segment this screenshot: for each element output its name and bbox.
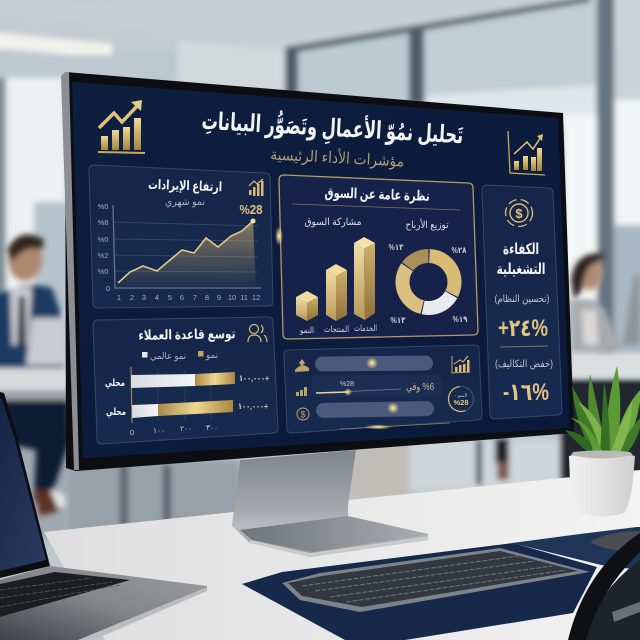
icon: scale <box>295 359 309 372</box>
donut labels: %٢٨ <box>452 245 467 255</box>
y axis labels: %0 <box>98 235 108 244</box>
panel heading <box>496 241 546 278</box>
y axis labels: %2 <box>98 251 108 260</box>
x axis labels: 9 <box>217 293 221 302</box>
x axis labels: 10 <box>228 293 236 302</box>
metric value: -١٦% <box>503 379 549 406</box>
donut labels: %١٣ <box>390 315 406 325</box>
x axis labels: 2 <box>130 293 134 302</box>
donut labels: %١٩ <box>452 314 468 324</box>
stand neck <box>232 450 428 557</box>
x axis labels: 11 <box>240 293 248 302</box>
panel background <box>93 317 278 444</box>
laptop base <box>0 566 207 640</box>
slider two: %28 <box>340 381 354 388</box>
gauge: النمو - <box>455 393 467 399</box>
line chart <box>98 202 261 302</box>
icon: dollar: $ <box>300 410 306 420</box>
laptop keyboard <box>0 572 130 618</box>
metric value: +٢٤% <box>498 315 548 342</box>
chair <box>568 533 640 640</box>
bar chart: محلي <box>105 378 125 389</box>
icon: right growth chart <box>508 131 545 175</box>
subtitle: مؤشرات الأداء الرئيسية <box>270 145 405 171</box>
panel heading: ارتفاع الإيرادات <box>148 177 222 194</box>
icon: coin <box>506 200 532 226</box>
x axis labels: 3 <box>142 293 146 302</box>
laptop lid <box>0 391 50 579</box>
panel: customer base <box>93 317 278 444</box>
slider two <box>312 375 442 397</box>
x axis labels: ٢٠٠ <box>180 424 192 433</box>
bar chart <box>105 367 269 437</box>
slider one <box>315 355 433 372</box>
panel: revenue growth <box>89 165 273 308</box>
x axis labels <box>117 293 260 302</box>
x axis labels: ٣٠٠ <box>206 423 218 432</box>
icon: mini bars <box>249 179 264 196</box>
icon: coin: $ <box>515 206 523 221</box>
main title: تَحليل نمُوّ الأعمالِ وتَصَوُّر البياناتِ <box>201 106 464 153</box>
legend: نمو عالمي <box>150 351 186 362</box>
x axis labels: 4 <box>155 293 159 302</box>
3D gold bars: النمو <box>299 325 314 335</box>
background person right <box>570 254 640 378</box>
bars heading: مشاركة السوق <box>304 217 362 228</box>
mouse <box>590 531 640 551</box>
pot <box>569 452 635 516</box>
y axis labels: %0 <box>98 202 108 211</box>
3D gold bars: الخدمات <box>354 323 377 333</box>
metric label: (تحسين النظام) <box>494 294 550 305</box>
panel subheading: نمو شهري <box>165 197 205 208</box>
slider two: %6 وفي <box>406 382 434 393</box>
bar chart: ١٠٠,٠٠٠+ <box>238 401 268 411</box>
panel: market overview <box>275 175 478 339</box>
3D gold bars: المنتجات <box>324 324 349 334</box>
panel: indicators <box>284 345 482 433</box>
slider three <box>316 401 434 418</box>
legend <box>142 350 218 362</box>
laptop <box>0 391 207 640</box>
panel background <box>284 345 482 433</box>
legend: نمو <box>205 350 218 361</box>
panel heading: توسع قاعدة العملاء <box>138 326 236 343</box>
gauge <box>445 383 477 415</box>
callout: 28 percent: %28 <box>240 202 262 217</box>
desk mat <box>242 543 597 640</box>
donut labels: %١٣ <box>388 242 404 252</box>
icon: left growth chart <box>98 100 145 153</box>
panel: operational efficiency <box>482 185 562 419</box>
donut labels <box>388 242 468 325</box>
icon: dollar <box>297 408 309 420</box>
x axis labels: 1 <box>117 293 121 302</box>
y axis labels <box>98 202 110 293</box>
keyboard <box>282 548 590 612</box>
x axis labels <box>130 423 218 437</box>
x axis labels: 6 <box>180 293 184 302</box>
background person left <box>0 234 70 516</box>
x axis labels: ١٠٠ <box>153 426 165 435</box>
x axis labels: 0 <box>130 428 134 437</box>
laptop screen <box>0 398 46 572</box>
monitor bezel <box>65 72 574 471</box>
icon: chart <box>452 356 470 373</box>
plant <box>565 366 640 516</box>
panel background <box>279 175 478 339</box>
desk surface <box>44 470 640 640</box>
monitor stand <box>232 450 428 557</box>
x axis labels: 8 <box>205 293 209 302</box>
y axis labels: %0 <box>98 267 108 276</box>
leaves <box>565 366 640 456</box>
icon: small bars <box>296 387 307 396</box>
donut chart <box>402 256 454 308</box>
donut heading: توزيع الأرباح <box>406 218 449 231</box>
panel heading: التشغيلية <box>496 261 546 278</box>
y axis labels: %8 <box>98 218 108 227</box>
screen <box>72 82 570 458</box>
x axis labels: 12 <box>252 293 260 302</box>
bar chart: محلي <box>106 407 126 418</box>
metric label: (خفض التكاليف) <box>495 359 553 370</box>
bar chart: ١٠٠,٠٠٠+ <box>239 373 269 383</box>
x axis labels: 5 <box>168 293 172 302</box>
panel heading: الكفاءة <box>503 241 539 258</box>
y axis labels: 0 <box>106 284 110 293</box>
panel background <box>89 165 273 308</box>
panel heading: نظرة عامة عن السوق <box>324 184 430 205</box>
glow line <box>340 423 450 430</box>
gauge: %28 <box>453 398 469 407</box>
x axis labels: 7 <box>193 293 197 302</box>
glow <box>275 226 283 246</box>
panel background <box>482 185 562 419</box>
icon: people <box>248 324 267 342</box>
second desk mat <box>512 527 640 570</box>
stand foot <box>240 516 428 552</box>
3D gold bars <box>296 237 377 335</box>
